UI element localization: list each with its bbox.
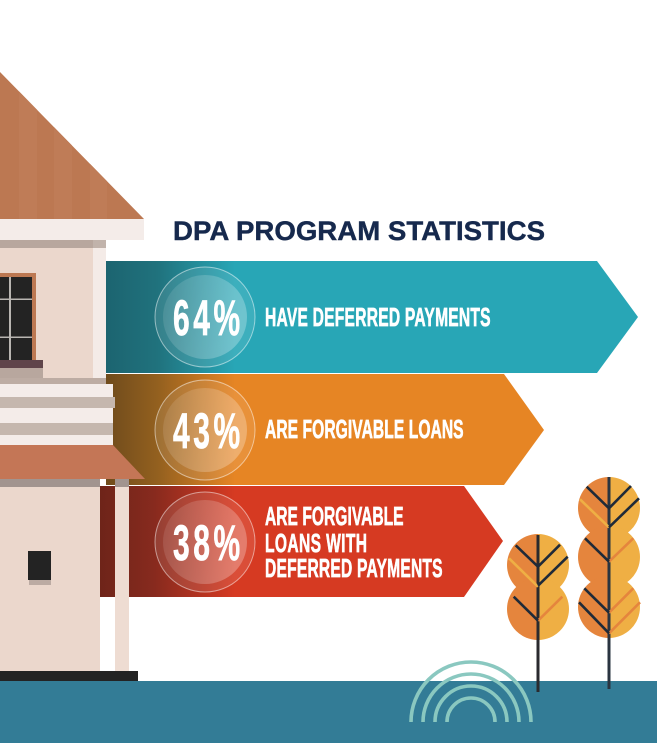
upper wall xyxy=(0,240,106,378)
stat: 38% are forgivable loans with deferred payments xyxy=(155,492,443,592)
label: ARE FORGIVABLE xyxy=(265,502,404,531)
lower wall xyxy=(0,479,100,671)
house illustration xyxy=(0,72,145,681)
house base xyxy=(0,671,138,681)
title: DPA PROGRAM STATISTICS xyxy=(173,216,545,246)
label xyxy=(265,502,443,583)
icon: concentric arcs xyxy=(411,662,531,722)
icon: small tree xyxy=(507,534,569,692)
roof xyxy=(0,72,144,219)
porch roof xyxy=(0,445,145,479)
percentage: 38% xyxy=(173,515,240,571)
circle badge xyxy=(155,492,255,592)
porch column xyxy=(115,479,129,671)
percentage: 64% xyxy=(173,290,240,346)
arrow: teal bar xyxy=(106,261,638,373)
label: DEFERRED PAYMENTS xyxy=(265,554,443,583)
small window xyxy=(28,551,51,585)
circle badge xyxy=(155,380,255,480)
label: ARE FORGIVABLE LOANS xyxy=(265,415,464,444)
percentage: 43% xyxy=(173,403,240,459)
arrow: orange bar xyxy=(106,374,544,485)
icon: tall tree xyxy=(578,477,640,689)
roof fascia xyxy=(0,219,144,240)
circle badge xyxy=(155,267,255,367)
stat: 64% have deferred payments xyxy=(155,267,491,367)
arrow: red bar xyxy=(100,486,503,597)
label: LOANS WITH xyxy=(265,529,367,558)
stat: 43% are forgivable loans xyxy=(155,380,464,480)
balcony bands xyxy=(0,378,115,445)
label: HAVE DEFERRED PAYMENTS xyxy=(265,303,491,332)
upper window xyxy=(0,273,43,378)
ground xyxy=(0,681,657,743)
